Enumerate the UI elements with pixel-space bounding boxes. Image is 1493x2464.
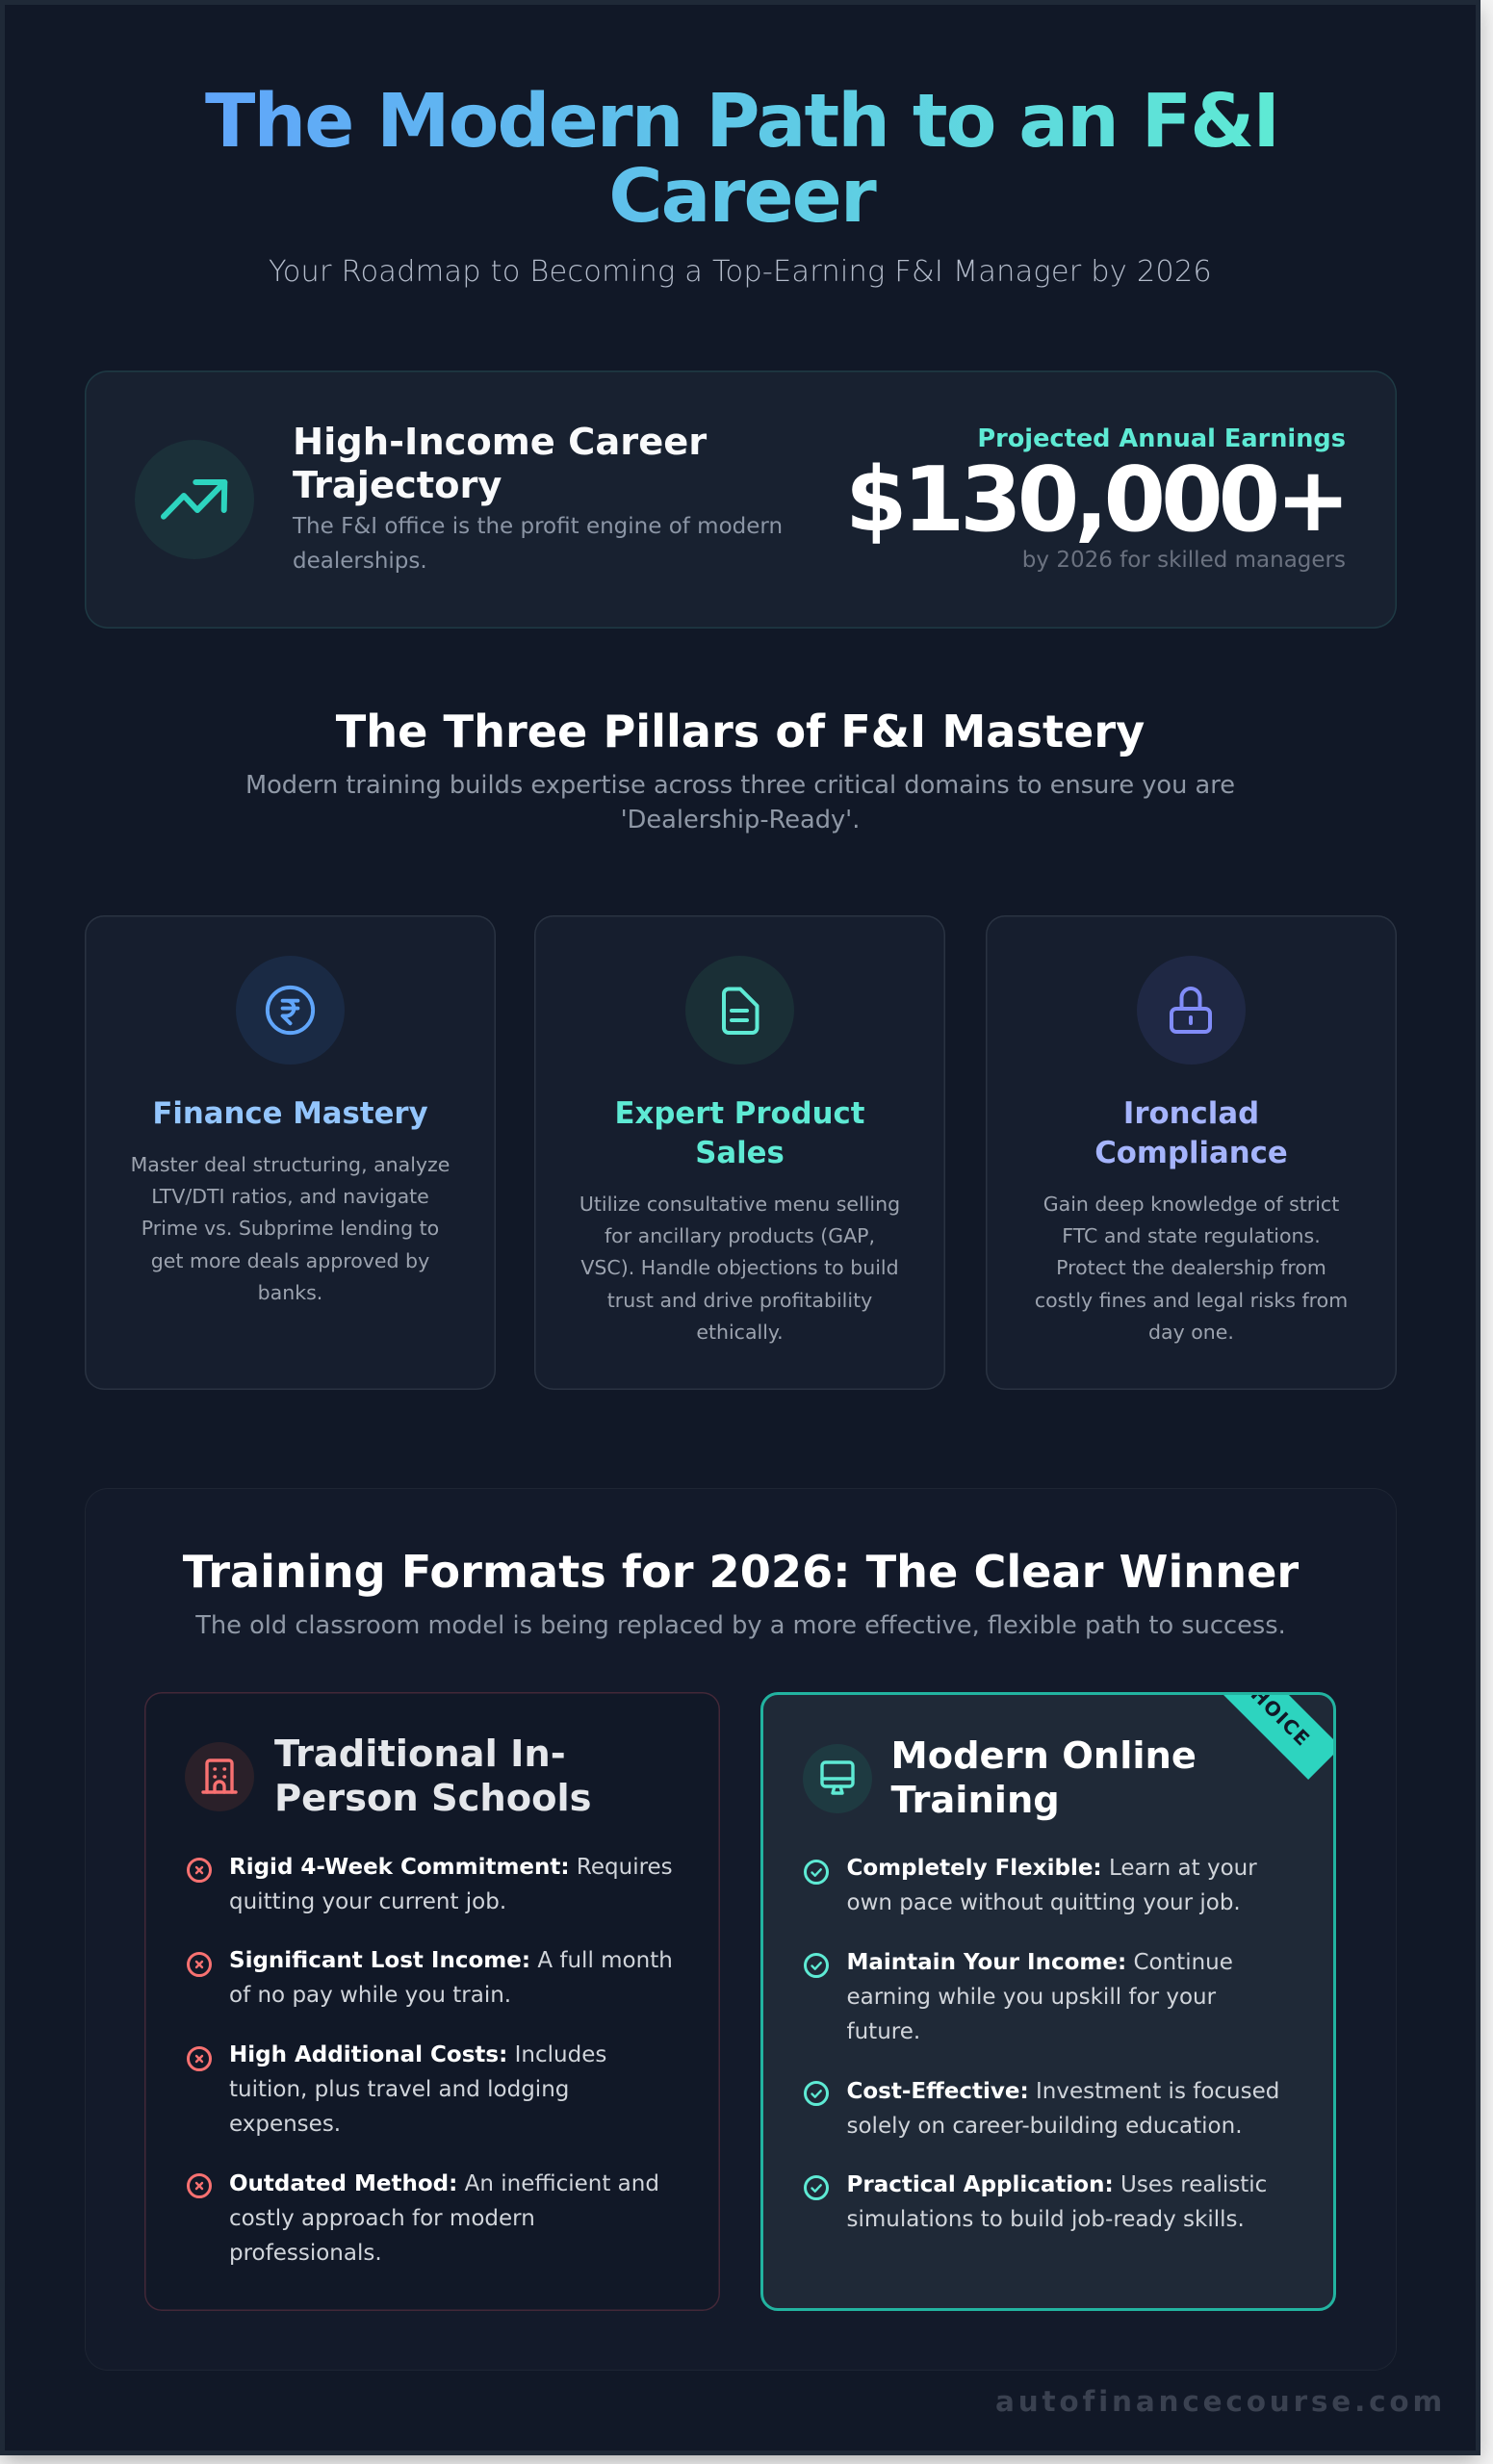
- icon: padlock: [1137, 956, 1246, 1065]
- compliance heading: Ironclad: [1123, 1095, 1259, 1130]
- icon: cross 1: [187, 1858, 212, 1883]
- online heading: Modern Online: [891, 1734, 1197, 1778]
- list item: cost-effective: Cost-Effective: Investment is focused: [847, 2079, 1279, 2104]
- list item: flexible: own pace without quitting your job.: [847, 1890, 1241, 1915]
- list item: outdated method: [229, 2171, 659, 2266]
- section description: three pillars: Modern training builds expertise across three critical domains to ensure you are: [245, 771, 1235, 800]
- list item: flexible: Completely Flexible: Learn at your: [847, 1856, 1257, 1881]
- training heading: Training Formats for 2026: The Clear Winner: [183, 1546, 1299, 1598]
- compliance heading: [1094, 1095, 1288, 1170]
- hero heading: High-Income Career: [293, 421, 707, 464]
- icon: check 2: [804, 1953, 829, 1978]
- list item: practical: simulations to build job-ready skills.: [847, 2207, 1245, 2232]
- compliance text: Gain deep knowledge of strict: [1043, 1193, 1339, 1216]
- icon: check 4: [804, 2175, 829, 2200]
- compliance text: costly fines and legal risks from: [1035, 1289, 1348, 1312]
- list item: cost-effective: [847, 2079, 1279, 2139]
- finance text: [131, 1153, 450, 1304]
- sales text: trust and drive profitability: [607, 1289, 872, 1312]
- icon: document: [685, 956, 794, 1065]
- list item: income: earning while you upskill for your: [847, 1985, 1216, 2010]
- icon: cross 4: [187, 2173, 212, 2198]
- list item: outdated method: Outdated Method: An inefficient and: [229, 2171, 659, 2196]
- section heading: three pillars: The Three Pillars of F&I Mastery: [336, 706, 1145, 757]
- compliance text: Protect the dealership from: [1056, 1256, 1326, 1279]
- list item: cost-effective: solely on career-building education.: [847, 2114, 1243, 2139]
- list item: income: [847, 1950, 1233, 2044]
- earnings figure: $130,000+: [845, 448, 1346, 552]
- list item: additional costs: [229, 2042, 606, 2137]
- panel: modern online training: [760, 1692, 1336, 2311]
- sales heading: Expert Product: [615, 1095, 864, 1130]
- panel: ironclad compliance: [986, 915, 1397, 1390]
- title: [204, 85, 1279, 235]
- list item: outdated method: costly approach for modern: [229, 2206, 535, 2231]
- icon: cross 2: [187, 1952, 212, 1977]
- finance text: banks.: [258, 1281, 322, 1304]
- panel: traditional in-person schools: [144, 1692, 720, 2311]
- sales heading: Sales: [695, 1136, 785, 1170]
- list item: additional costs: tuition, plus travel and lodging: [229, 2077, 569, 2102]
- earnings note: by 2026 for skilled managers: [1022, 548, 1346, 573]
- list item: income: Maintain Your Income: Continue: [847, 1950, 1233, 1975]
- title: Career: [608, 154, 875, 239]
- finance text: get more deals approved by: [151, 1249, 429, 1272]
- list item: practical: Practical Application: Uses realistic: [847, 2172, 1267, 2197]
- icon: check 3: [804, 2081, 829, 2106]
- hero heading: [293, 421, 707, 507]
- title: The Modern Path to an F&I: [205, 79, 1278, 164]
- sales text: [579, 1193, 900, 1344]
- ribbon: choice badge: [1104, 1542, 1341, 1780]
- finance text: Prime vs. Subprime lending to: [142, 1217, 439, 1240]
- earnings label: Projected Annual Earnings: [977, 424, 1346, 453]
- icon: rupee coin: [236, 956, 345, 1065]
- list item: additional costs: expenses.: [229, 2112, 341, 2137]
- list item: commitment: [229, 1854, 673, 1913]
- icon: trending up arrow: [135, 440, 254, 559]
- icon: cross 3: [187, 2046, 212, 2071]
- online heading: Training: [891, 1779, 1060, 1822]
- list item: commitment: Rigid 4-Week Commitment: Requires: [229, 1854, 673, 1879]
- hero description: The F&I office is the profit engine of modern: [293, 514, 783, 539]
- finance heading: Finance Mastery: [152, 1095, 428, 1130]
- section description: three pillars: 'Dealership-Ready'.: [621, 806, 860, 834]
- traditional heading: [274, 1732, 592, 1820]
- training description: The old classroom model is being replaced by a more effective, flexible path to success.: [195, 1611, 1286, 1640]
- compliance heading: Compliance: [1094, 1136, 1288, 1170]
- compliance text: FTC and state regulations.: [1062, 1224, 1321, 1247]
- hero heading: Trajectory: [293, 464, 502, 507]
- sales text: Utilize consultative menu selling: [579, 1193, 900, 1216]
- watermark: autofinancecourse.com: [995, 2385, 1446, 2418]
- online heading: [891, 1734, 1197, 1822]
- panel: expert product sales: [534, 915, 945, 1390]
- traditional heading: Person Schools: [274, 1777, 592, 1820]
- sales heading: [615, 1095, 864, 1170]
- list item: income: future.: [847, 2019, 920, 2044]
- list item: lost income: Significant Lost Income: A full month: [229, 1948, 673, 1973]
- subtitle: Your Roadmap to Becoming a Top-Earning F&I Manager by 2026: [269, 254, 1212, 289]
- compliance text: day one.: [1148, 1321, 1234, 1344]
- hero description: [293, 514, 783, 574]
- list item: lost income: of no pay while you train.: [229, 1983, 511, 2008]
- panel: training formats: [85, 1488, 1397, 2371]
- list item: practical: [847, 2172, 1267, 2232]
- list item: lost income: [229, 1948, 673, 2008]
- icon: check 1: [804, 1860, 829, 1885]
- icon: monitor: [803, 1744, 872, 1813]
- panel: finance mastery: [85, 915, 496, 1390]
- list item: flexible: [847, 1856, 1257, 1915]
- sales text: ethically.: [696, 1321, 784, 1344]
- icon: building: [185, 1742, 254, 1811]
- finance text: LTV/DTI ratios, and navigate: [151, 1185, 429, 1208]
- list item: outdated method: professionals.: [229, 2241, 382, 2266]
- list item: additional costs: High Additional Costs: Includes: [229, 2042, 606, 2067]
- hero description: dealerships.: [293, 549, 427, 574]
- panel: high-income career hero: [85, 371, 1397, 629]
- finance text: Master deal structuring, analyze: [131, 1153, 450, 1176]
- section description: three pillars: [245, 771, 1235, 834]
- sales text: for ancillary products (GAP,: [605, 1224, 875, 1247]
- traditional heading: Traditional In-: [274, 1732, 566, 1776]
- list item: commitment: quitting your current job.: [229, 1888, 506, 1913]
- compliance text: [1035, 1193, 1348, 1344]
- sales text: VSC). Handle objections to build: [580, 1256, 899, 1279]
